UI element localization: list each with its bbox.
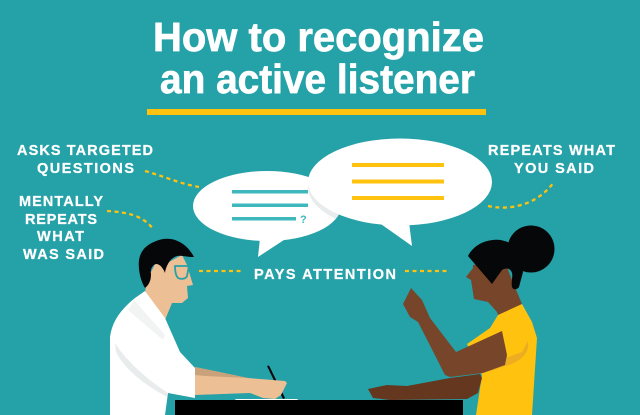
dotted line: asks targeted questions bbox=[145, 171, 199, 187]
dotted line: mentally repeats bbox=[107, 211, 153, 229]
label: mentally repeats what was said: WAS SAID bbox=[23, 247, 104, 263]
bubble shadow bbox=[308, 185, 339, 219]
hair bun bbox=[508, 226, 554, 272]
woman bbox=[368, 226, 554, 415]
label: mentally repeats what was said: REPEATS bbox=[25, 212, 97, 228]
label: repeats what you said: REPEATS WHAT bbox=[488, 143, 615, 159]
dotted line: pays attention left bbox=[199, 270, 244, 272]
title: an active listener bbox=[160, 56, 475, 102]
label: mentally repeats what was said bbox=[19, 194, 104, 263]
table bbox=[175, 400, 463, 415]
label: asks targeted questions: QUESTIONS bbox=[37, 161, 134, 177]
raised arm bbox=[403, 288, 507, 377]
label: asks targeted questions: ASKS TARGETED bbox=[17, 143, 153, 159]
shirt shadow bbox=[115, 343, 168, 397]
label: repeats what you said bbox=[488, 143, 615, 177]
glasses bbox=[175, 266, 189, 279]
title: How to recognize bbox=[153, 14, 484, 60]
paper bbox=[235, 399, 298, 402]
title underline bbox=[147, 109, 486, 115]
shirt bbox=[110, 291, 195, 415]
hair bbox=[139, 239, 194, 288]
dotted line: pays attention right bbox=[405, 270, 450, 272]
label: pays attention: PAYS ATTENTION bbox=[254, 267, 396, 283]
label: mentally repeats what was said: WHAT bbox=[37, 229, 84, 245]
resting arm bbox=[368, 374, 482, 400]
text lines with question mark: ? bbox=[300, 214, 307, 226]
pen bbox=[267, 366, 285, 399]
text lines bbox=[352, 163, 444, 200]
shirt shadow bbox=[488, 341, 528, 372]
shirt bbox=[467, 304, 537, 415]
speech bubble: right bbox=[308, 138, 492, 246]
label: asks targeted questions bbox=[17, 143, 153, 177]
speech bubble: left bbox=[193, 171, 339, 257]
label: mentally repeats what was said: MENTALLY bbox=[19, 194, 103, 210]
dotted line: repeats what you said bbox=[488, 182, 554, 208]
neck and face bbox=[466, 262, 522, 318]
arm bbox=[195, 367, 287, 399]
neck and face bbox=[145, 255, 193, 320]
title bbox=[153, 14, 484, 102]
hair bbox=[468, 240, 523, 289]
text lines with question mark bbox=[232, 190, 308, 226]
man: listener with pen bbox=[110, 239, 287, 415]
label: repeats what you said: YOU SAID bbox=[514, 161, 594, 177]
